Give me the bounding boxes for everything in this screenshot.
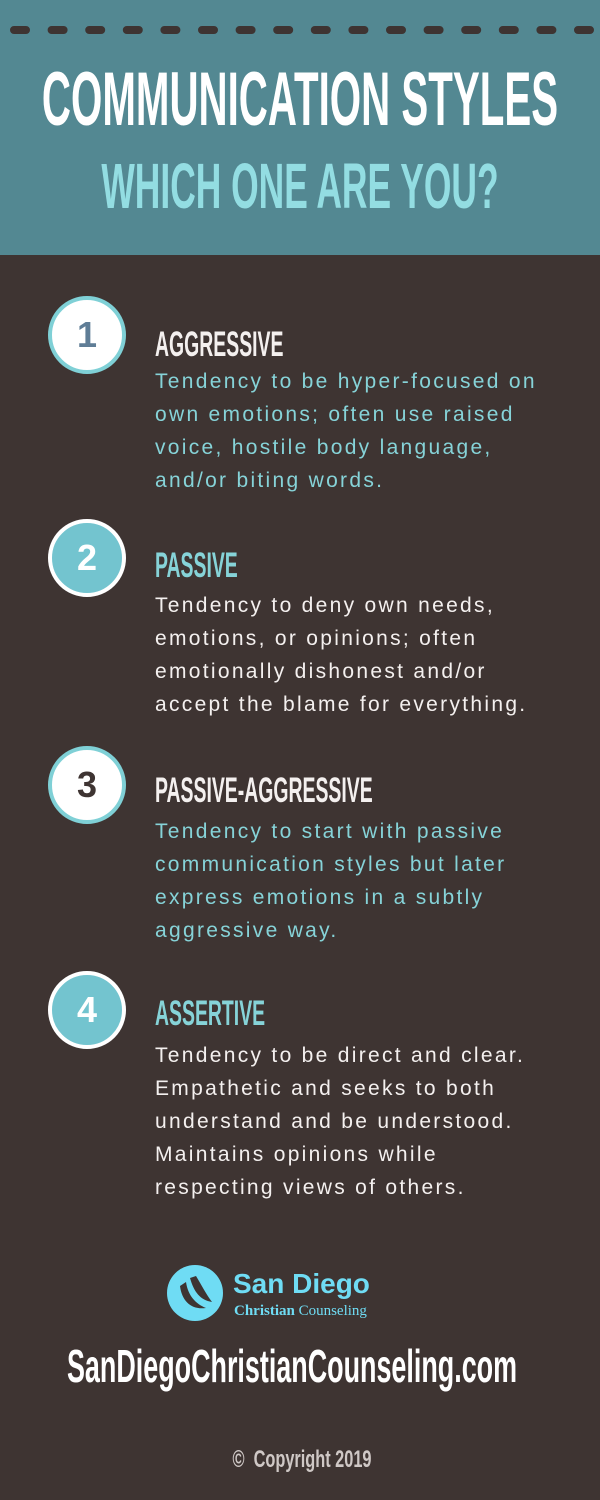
icon: number 1	[48, 296, 126, 374]
icon: logo circle	[167, 1265, 223, 1321]
icon: number 2: 2	[77, 537, 97, 578]
heading: passive-aggressive: PASSIVE-AGGRESSIVE	[155, 771, 373, 810]
text: passive-aggressive	[155, 820, 506, 942]
text: passive: emotionally dishonest and/or	[155, 660, 487, 683]
icon: number 3	[48, 746, 126, 824]
text: passive: emotions, or opinions; often	[155, 627, 477, 650]
text: assertive	[155, 1044, 525, 1199]
subtitle: WHICH ONE ARE YOU?	[101, 150, 499, 222]
item 3	[48, 746, 506, 942]
text: aggressive: and/or biting words.	[155, 469, 384, 492]
text: assertive: Tendency to be direct and clear.	[155, 1044, 525, 1067]
text: passive: accept the blame for everything.	[155, 693, 527, 716]
text: passive-aggressive: communication styles but later	[155, 853, 506, 876]
text: passive-aggressive: Tendency to start with passive	[155, 820, 504, 843]
text: passive: Tendency to deny own needs,	[155, 594, 495, 617]
text: passive	[155, 594, 527, 716]
icon: number 4	[48, 971, 126, 1049]
text: assertive: Maintains opinions while	[155, 1143, 438, 1166]
icon: number 1: 1	[77, 314, 97, 355]
text: passive-aggressive: aggressive way.	[155, 919, 339, 942]
logo: Christian Counseling	[234, 1303, 367, 1319]
item 2	[48, 519, 527, 716]
text: passive-aggressive: express emotions in a subtly	[155, 886, 484, 909]
website url: SanDiegoChristianCounseling.com	[67, 1340, 517, 1392]
copyright: © Copyright 2019	[233, 1446, 371, 1473]
item 4	[48, 971, 525, 1199]
text: aggressive: voice, hostile body language,	[155, 436, 493, 459]
text: assertive: Empathetic and seeks to both	[155, 1077, 496, 1100]
text: assertive: understand and be understood.	[155, 1110, 514, 1133]
logo	[167, 1265, 370, 1321]
text: aggressive	[155, 370, 537, 492]
icon: number 3: 3	[77, 764, 97, 805]
logo text: San Diego	[233, 1268, 370, 1299]
header panel	[0, 0, 600, 255]
heading: assertive: ASSERTIVE	[155, 994, 265, 1033]
title: COMMUNICATION STYLES	[42, 57, 558, 142]
text: aggressive: own emotions; often use raised	[155, 403, 515, 426]
text: assertive: respecting views of others.	[155, 1176, 466, 1199]
heading: aggressive: AGGRESSIVE	[155, 325, 283, 364]
item 1	[48, 296, 537, 492]
icon: number 2	[48, 519, 126, 597]
heading: passive: PASSIVE	[155, 546, 238, 585]
dashed line	[10, 26, 594, 34]
text: aggressive: Tendency to be hyper-focused on	[155, 370, 537, 393]
icon: number 4: 4	[77, 989, 97, 1030]
